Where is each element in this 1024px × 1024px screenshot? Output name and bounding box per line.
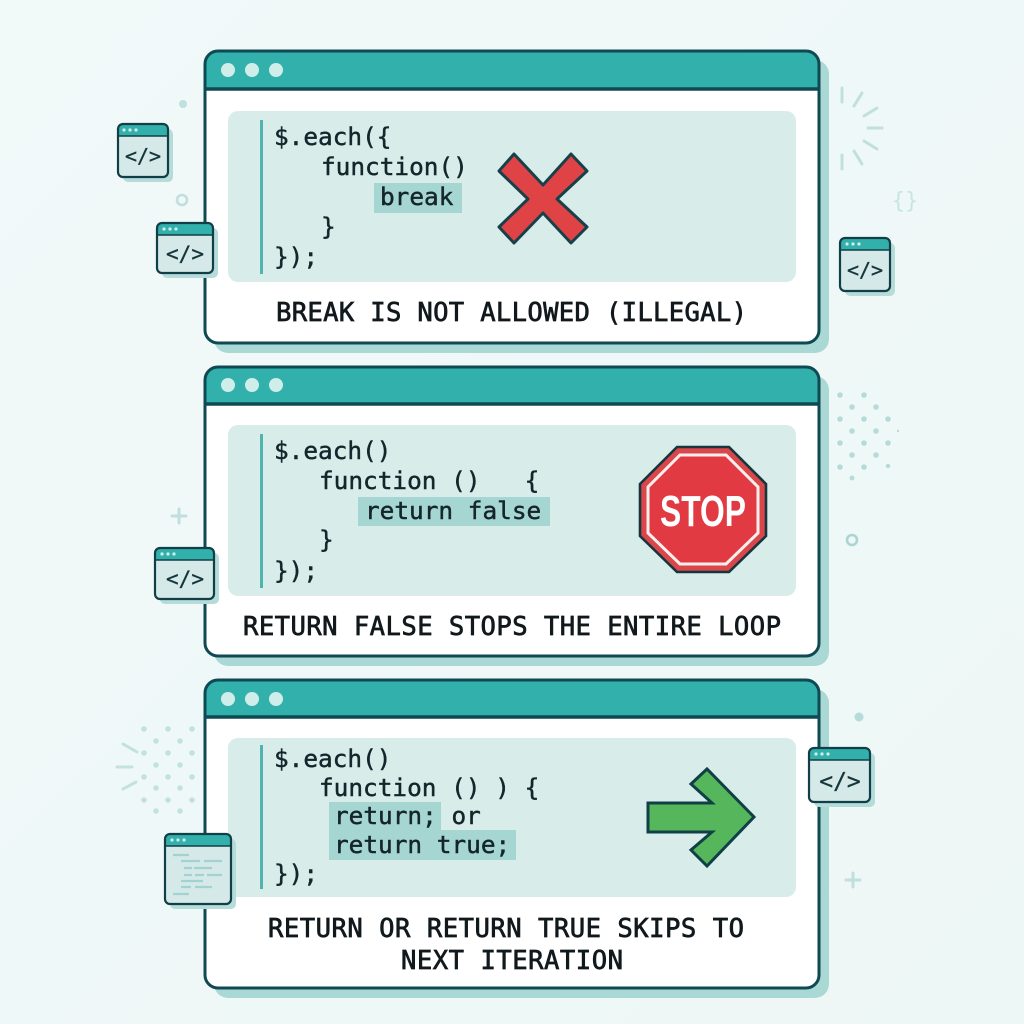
caption: BREAK IS NOT ALLOWED (ILLEGAL) [276,298,747,328]
code text: return true; [334,830,510,859]
code text [274,744,539,888]
caption: RETURN OR RETURN TRUE SKIPS TO [268,914,744,944]
icon: code window on panel 1 edge [157,223,218,278]
code text: function () ) { [319,773,539,802]
icon: code window top left: </> [125,144,161,168]
icon: code window on panel 1 edge: </> [166,242,204,266]
panel: break is not allowed [205,51,829,353]
decoration: small dots and rings [172,100,864,887]
code text [274,122,468,271]
code text: function() [321,152,468,181]
icon: code window right of panel 1 [840,238,895,296]
window dots [221,63,283,77]
icon: code window right of panel 1: </> [847,258,883,282]
code box [228,425,796,596]
decoration: dot field right of panel 2 [837,392,899,480]
icon: code window on panel 2 edge: </> [166,567,204,591]
caption [268,914,744,976]
code text: return; or [334,801,481,830]
code text: function () { [319,466,539,495]
code text: }); [274,242,318,271]
decoration: dot field and rays left of panel 3 [117,726,195,814]
panel: return or return true skips [205,680,829,998]
code box [228,738,796,897]
highlight: return and return true [329,802,516,860]
panel: return false stops the loop [205,367,829,666]
code text: $.each() [274,744,391,773]
icon: code window on panel 3 right edge [809,748,875,807]
code text [274,436,541,585]
code text: } [321,212,336,241]
code text: $.each() [274,436,391,465]
code text: break [380,182,454,211]
icon: code window on panel 3 right edge: </> [819,769,861,795]
icon: stop sign: STOP [660,487,746,536]
icon: document window on panel 3 left edge [165,834,236,909]
decoration: curly braces: {} [892,189,918,214]
icon: red cross [499,154,587,243]
code text: $.each({ [274,122,391,151]
code text: } [319,525,334,554]
caption: RETURN FALSE STOPS THE ENTIRE LOOP [243,612,781,642]
icon: green arrow [648,769,754,866]
code box [228,111,796,282]
code text: }); [274,859,318,888]
icon: code window top left [118,124,173,182]
icon: code window on panel 2 edge [155,548,219,604]
highlight: return false [358,497,550,526]
decoration: top right burst [842,88,882,169]
code text: }); [274,556,318,585]
icon: stop sign [640,447,766,572]
caption: NEXT ITERATION [401,946,623,976]
highlight: break [374,183,462,213]
window dots [221,692,283,706]
window dots [221,378,283,392]
code text: return false [365,496,541,525]
